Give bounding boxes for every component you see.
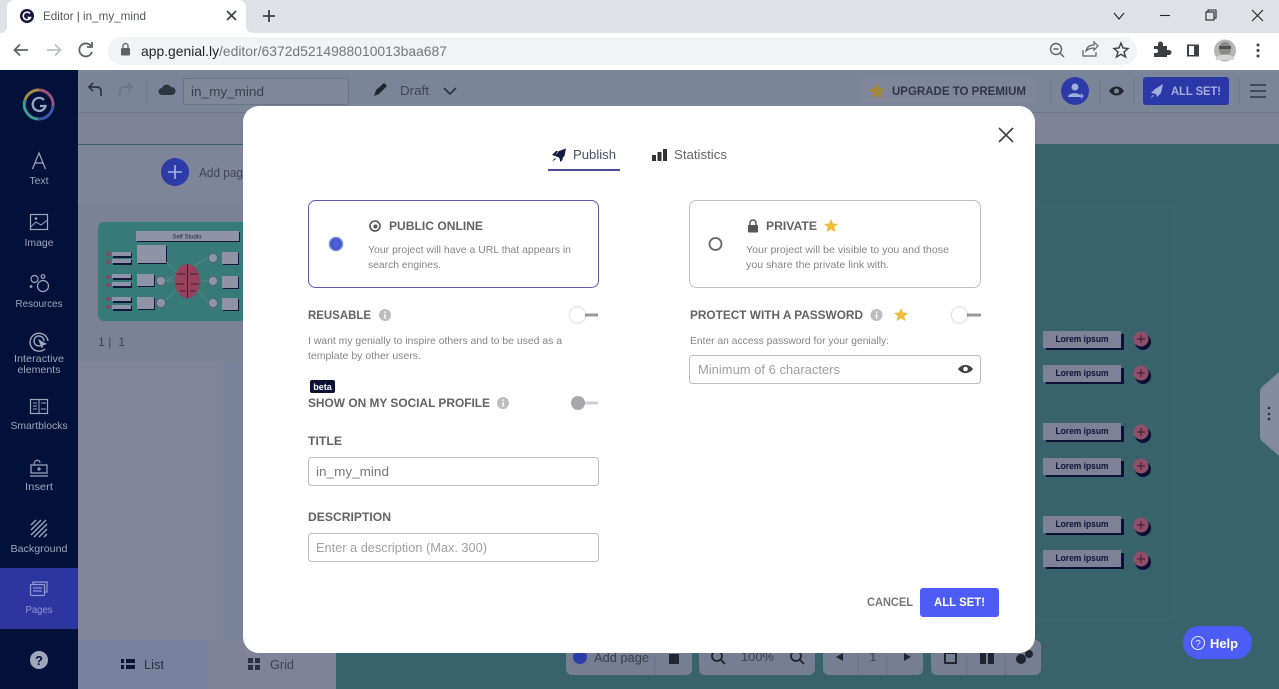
icon: tab favicon xyxy=(20,9,34,23)
publish modal xyxy=(243,106,1035,653)
radio selected xyxy=(330,238,342,250)
icon: share xyxy=(1083,42,1098,56)
sidebar item: smartblocks xyxy=(10,400,68,432)
sidebar item: background xyxy=(10,520,68,555)
url: app.genial.ly/editor/6372d5214988010013baa687 xyxy=(141,43,447,59)
sidebar item: insert: Insert xyxy=(25,481,53,493)
field: title: in_my_mind xyxy=(316,464,389,479)
icon: browser menu xyxy=(1256,44,1260,58)
window controls xyxy=(1114,10,1263,21)
sidebar item: text: Text xyxy=(30,175,49,187)
page navigation xyxy=(836,650,911,664)
lorem button 3: Lorem ipsum xyxy=(1056,426,1108,436)
all set button xyxy=(1143,77,1229,105)
icon: padlock xyxy=(121,44,130,56)
help button: Help xyxy=(1210,636,1238,651)
zoom control xyxy=(712,650,804,664)
browser toolbar xyxy=(0,33,1279,70)
beta badge xyxy=(310,380,335,393)
icon: draft chevron xyxy=(444,88,456,94)
upgrade to premium: UPGRADE TO PREMIUM xyxy=(892,84,1026,98)
add page button: Add pag xyxy=(199,165,243,180)
sidebar item: insert xyxy=(25,460,53,493)
list view tab: List xyxy=(144,658,165,672)
sidebar item: text xyxy=(30,153,49,187)
project name field: in_my_mind xyxy=(191,84,264,99)
toggle off xyxy=(570,308,598,322)
icon: redo xyxy=(120,83,132,96)
field: title: TITLE xyxy=(308,434,342,448)
icon: premium star xyxy=(894,308,908,321)
icon: add collaborator xyxy=(1061,77,1089,105)
setting: password protection xyxy=(690,308,981,384)
icon: new tab xyxy=(263,10,275,22)
option: private: PRIVATE xyxy=(766,219,817,233)
toggle disabled xyxy=(571,396,598,410)
lorem button 3 xyxy=(1043,423,1124,442)
beta badge: beta xyxy=(313,382,333,392)
option: public online: search engines. xyxy=(368,259,441,271)
thumbnail title xyxy=(136,231,240,242)
option: private: Your project will be visible to you and those xyxy=(746,244,949,256)
icon: undo xyxy=(89,83,101,96)
icon: help: ? xyxy=(35,653,43,668)
icon: reload xyxy=(79,42,92,56)
sidebar item: interactive elements: elements xyxy=(18,364,60,376)
setting: reusable: I want my genially to inspire others and to be used as a xyxy=(308,335,562,347)
field: description: Enter a description (Max. 300) xyxy=(316,541,487,555)
icon: zoom out xyxy=(1050,44,1064,57)
grid view tab: Grid xyxy=(270,658,294,672)
view tools xyxy=(944,650,1033,664)
sidebar item: pages active xyxy=(0,568,78,629)
page navigation: 1 xyxy=(870,650,877,664)
icon: help xyxy=(30,651,48,669)
lorem button 2: Lorem ipsum xyxy=(1056,368,1108,378)
page counter: 1 | 1 xyxy=(98,335,125,349)
browser tab strip xyxy=(0,0,1279,33)
lorem button 4: Lorem ipsum xyxy=(1056,461,1108,471)
field: title xyxy=(308,434,598,486)
icon: close modal xyxy=(999,128,1013,142)
plus buttons xyxy=(1134,332,1151,570)
left sidebar xyxy=(0,70,78,689)
icon: preview eye xyxy=(1109,86,1124,96)
all set action: ALL SET! xyxy=(934,595,985,609)
icon: bookmark star xyxy=(1114,43,1128,57)
radio unselected xyxy=(710,238,722,250)
page thumbnail xyxy=(98,222,248,321)
add page control xyxy=(573,650,679,665)
add page button xyxy=(161,158,243,186)
thumbnail title: Self Studio xyxy=(172,234,202,240)
lorem button 6 xyxy=(1043,550,1124,569)
sidebar item: image xyxy=(24,214,54,249)
sidebar item: image: Image xyxy=(24,237,54,249)
tab: statistics: Statistics xyxy=(674,147,728,162)
sidebar item: smartblocks: Smartblocks xyxy=(10,420,68,432)
icon: cloud saved xyxy=(159,85,176,95)
help button xyxy=(1183,626,1252,659)
address bar xyxy=(108,37,1137,65)
setting: reusable: template by other users. xyxy=(308,350,421,362)
project name field xyxy=(184,78,348,104)
sidebar item: resources xyxy=(16,275,62,310)
canvas lorem ipsum buttons xyxy=(1043,331,1151,570)
sidebar item: resources: Resources xyxy=(16,298,62,310)
field: description xyxy=(308,510,598,562)
icon: extensions xyxy=(1154,42,1172,57)
setting: password protection: Enter an access password for your genially: xyxy=(690,335,889,347)
upgrade to premium xyxy=(860,78,1033,103)
draft status: Draft xyxy=(400,84,430,98)
icon: back xyxy=(14,44,28,56)
field: description: DESCRIPTION xyxy=(308,510,391,524)
setting: password protection: Minimum of 6 characters xyxy=(698,363,840,377)
lorem button 5 xyxy=(1043,516,1124,535)
lorem button 4 xyxy=(1043,458,1124,477)
sidebar item: pages active: Pages xyxy=(26,604,52,616)
option: public online: Your project will have a URL that appears in xyxy=(368,244,571,256)
option: public online xyxy=(308,200,598,288)
lorem button 2 xyxy=(1043,365,1124,384)
all set action xyxy=(920,588,999,617)
option: private xyxy=(690,200,980,288)
option: public online: PUBLIC ONLINE xyxy=(389,219,483,233)
bottom canvas toolbar xyxy=(566,635,1041,675)
icon: show password xyxy=(958,365,973,373)
pages panel xyxy=(78,145,336,689)
cancel action: CANCEL xyxy=(867,595,913,609)
grid view tab xyxy=(208,640,336,689)
tab: statistics xyxy=(652,147,728,162)
icon: lock xyxy=(748,220,758,232)
icon: side panel xyxy=(1187,44,1199,56)
icon: user avatar xyxy=(1214,40,1236,62)
sidebar item: interactive elements xyxy=(14,333,64,376)
help button: ? xyxy=(1195,639,1201,650)
editor top bar xyxy=(78,70,1279,112)
add page control: Add page xyxy=(594,651,649,665)
list view tab xyxy=(78,640,208,689)
tab: publish: Publish xyxy=(573,147,616,162)
icon: close tab xyxy=(227,11,236,20)
icon: menu xyxy=(1250,85,1266,97)
thumbnail brain xyxy=(166,258,208,303)
icon: pencil xyxy=(374,83,387,96)
sidebar item: background: Background xyxy=(10,543,68,555)
setting: reusable xyxy=(308,308,598,362)
icon: star xyxy=(824,219,838,232)
setting: social profile xyxy=(308,380,598,410)
icon: globe xyxy=(370,221,380,231)
setting: reusable: REUSABLE xyxy=(308,308,371,322)
icon: forward xyxy=(47,44,60,56)
all set button: ALL SET! xyxy=(1171,84,1221,98)
password toggle xyxy=(952,308,981,322)
right side panel handle xyxy=(1260,372,1279,456)
tab: publish xyxy=(548,147,620,171)
lorem button 5: Lorem ipsum xyxy=(1056,519,1108,529)
lorem button 6: Lorem ipsum xyxy=(1056,553,1108,563)
lorem button 1: Lorem ipsum xyxy=(1056,334,1108,344)
tab title: Editor | in_my_mind xyxy=(43,9,146,23)
lorem button 1 xyxy=(1043,331,1124,350)
setting: social profile: SHOW ON MY SOCIAL PROFILE xyxy=(308,396,490,410)
sidebar item: interactive elements: Interactive xyxy=(14,353,64,365)
icon: logo xyxy=(24,90,53,119)
option: private: you share the private link with. xyxy=(746,259,889,271)
setting: password protection: PROTECT WITH A PASSWORD xyxy=(690,308,863,322)
zoom control: 100% xyxy=(741,650,774,664)
